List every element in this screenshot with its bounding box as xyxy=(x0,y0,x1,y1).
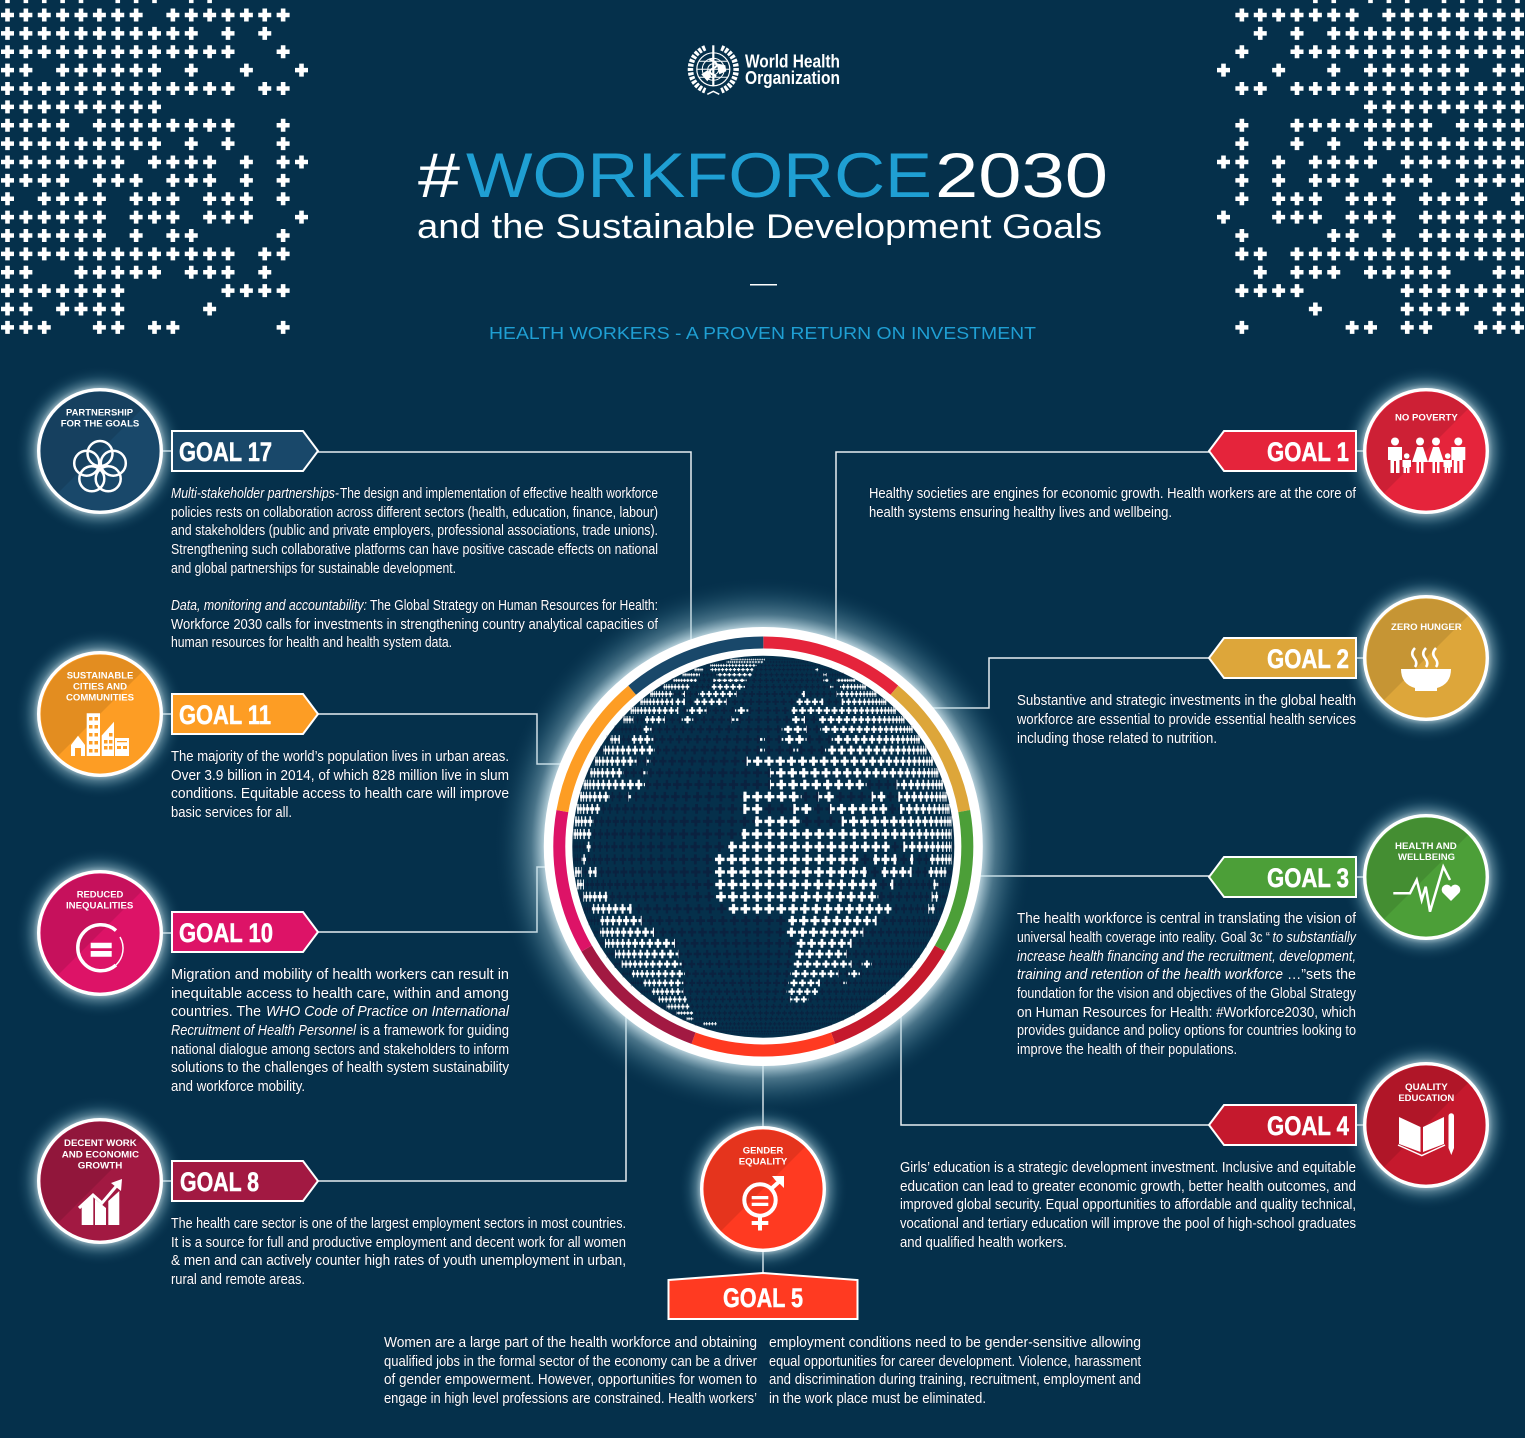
text: goal 3: The health workforce is central in translating the vision of xyxy=(1017,911,1357,927)
text: goal 4: Girls’ education is a strategic development investment. Inclusive and equitable xyxy=(900,1160,1356,1176)
text: goal 8: & men and can actively counter high rates of youth unemployment in urban, xyxy=(171,1253,626,1269)
text: goal 5 right column: in the work place must be eliminated. xyxy=(769,1391,986,1407)
icon: goal 8 badge: DECENT WORK xyxy=(64,1138,137,1148)
text: goal 10: and workforce mobility. xyxy=(171,1079,305,1095)
text: goal 10: Recruitment of Health Personnel xyxy=(171,1023,357,1039)
WHO logo: Organization xyxy=(745,68,840,88)
icon: goal 4 badge xyxy=(1341,1040,1511,1210)
icon: goal 17 badge xyxy=(15,366,185,536)
dotted plus pattern: top right xyxy=(1217,0,1524,334)
icon: goal 3 badge: HEALTH AND xyxy=(1395,841,1457,851)
dotted plus pattern: top left xyxy=(1,0,308,334)
tag: goal 5: GOAL 5 xyxy=(723,1283,803,1313)
text: goal 5 left column: Women are a large part of the health workforce and obtaining xyxy=(384,1335,757,1351)
text: goal 17: Strengthening such collaborative platforms can have positive cascade effects on national xyxy=(171,542,658,558)
Goal 10 xyxy=(15,848,510,1095)
text: goal 5 right column xyxy=(769,1335,1141,1407)
text: goal 17: and global partnerships for sustainable development. xyxy=(171,561,456,577)
icon: goal 3 badge xyxy=(1341,792,1511,962)
text: goal 10: Migration and mobility of health workers can result in xyxy=(171,967,509,983)
ring segments xyxy=(559,642,967,1051)
text: goal 11 xyxy=(171,749,509,821)
subtitle: and the Sustainable Development Goals xyxy=(417,208,1102,246)
icon: goal 8 badge: GROWTH xyxy=(78,1160,122,1170)
text: goal 17 xyxy=(171,486,659,651)
Goal 5 xyxy=(384,1104,1141,1407)
text: goal 10: is a framework for guiding xyxy=(360,1023,509,1039)
icon: goal 5 badge xyxy=(678,1104,848,1274)
text: goal 2: including those related to nutrition. xyxy=(1017,731,1217,747)
tag: goal 1 xyxy=(1209,431,1356,471)
text: goal 5 left column: of gender empowerment. However, opportunities for women to xyxy=(384,1372,757,1388)
connector lines xyxy=(163,451,1364,1280)
WHO logo xyxy=(690,45,840,94)
text: goal 3: increase health financing and the recruitment, development, xyxy=(1017,949,1356,965)
text: goal 3: universal health coverage into reality. Goal 3c “ xyxy=(1017,930,1270,946)
text: goal 4: education can lead to greater economic growth, better health outcomes, and xyxy=(900,1179,1356,1195)
text: goal 17: policies rests on collaboration across different sectors (health, education, finance, labour) xyxy=(171,505,658,521)
text: goal 10: countries. The xyxy=(171,1004,261,1020)
divider xyxy=(750,284,777,286)
title: # xyxy=(418,141,460,211)
text: goal 17: Multi-stakeholder partnerships- xyxy=(171,486,339,502)
text: goal 4: and qualified health workers. xyxy=(900,1235,1067,1251)
tag: goal 1: GOAL 1 xyxy=(1267,437,1349,467)
text: goal 3 xyxy=(1017,911,1357,1058)
icon: goal 11 badge xyxy=(15,629,185,799)
tag: goal 17: GOAL 17 xyxy=(179,437,272,467)
Goal 4 xyxy=(900,1040,1511,1251)
text: goal 10 xyxy=(171,967,510,1095)
tag: goal 10 xyxy=(172,912,318,952)
text: goal 4: improved global security. Equal opportunities to affordable and quality technical, xyxy=(900,1197,1356,1213)
tag: goal 11 xyxy=(172,694,318,734)
icon: goal 17 badge: PARTNERSHIP xyxy=(66,408,133,418)
tag: goal 5 xyxy=(668,1273,858,1319)
text: goal 3: training and retention of the health workforce xyxy=(1017,967,1283,983)
text: goal 5 right column: and discrimination during training, recruitment, employment and xyxy=(769,1372,1141,1388)
icon: goal 10 badge: INEQUALITIES xyxy=(66,900,133,910)
icon: goal 3 badge: WELLBEING xyxy=(1398,852,1455,862)
text: goal 8: rural and remote areas. xyxy=(171,1272,305,1288)
text: goal 8: It is a source for full and productive employment and decent work for all women xyxy=(171,1235,626,1251)
icon: goal 5 badge: EQUALITY xyxy=(739,1156,787,1166)
title xyxy=(418,141,1108,211)
text: goal 11: The majority of the world’s population lives in urban areas. xyxy=(171,749,509,765)
tag: goal 2 xyxy=(1209,638,1356,678)
text: goal 3: foundation for the vision and objectives of the Global Strategy xyxy=(1017,986,1357,1002)
text: goal 5 left column: qualified jobs in the formal sector of the economy can be a driver xyxy=(384,1354,757,1370)
tagline: HEALTH WORKERS - A PROVEN RETURN ON INVESTMENT xyxy=(489,323,1036,343)
icon: goal 11 badge: CITIES AND xyxy=(73,681,128,691)
icon: goal 10 badge xyxy=(15,848,185,1018)
text: goal 1: health systems ensuring healthy lives and wellbeing. xyxy=(869,505,1172,521)
Goal 17 xyxy=(15,366,659,651)
icon: goal 8 badge: AND ECONOMIC xyxy=(62,1149,140,1159)
icon: goal 10 badge: REDUCED xyxy=(77,890,124,900)
text: goal 11: Over 3.9 billion in 2014, of which 828 million live in slum xyxy=(171,768,509,784)
icon: goal 5 badge: GENDER xyxy=(743,1145,784,1155)
text: goal 8: The health care sector is one of the largest employment sectors in most countries. xyxy=(171,1216,626,1232)
text: goal 17: and stakeholders (public and private employers, professional associations, trade unions). xyxy=(171,523,658,539)
text: goal 10: WHO Code of Practice on International xyxy=(266,1004,510,1020)
icon: goal 2 badge xyxy=(1341,573,1511,743)
text: goal 11: basic services for all. xyxy=(171,805,292,821)
tag: goal 3: GOAL 3 xyxy=(1267,863,1349,893)
text: goal 3: …”sets the xyxy=(1287,967,1356,983)
text: goal 5 left column xyxy=(384,1335,757,1407)
text: goal 8 xyxy=(171,1216,626,1288)
text: goal 10: inequitable access to health care, within and among xyxy=(171,986,509,1002)
text: goal 4: vocational and tertiary education will improve the pool of high-school graduates xyxy=(900,1216,1356,1232)
text: goal 3: on Human Resources for Health: #Workforce2030, which xyxy=(1017,1005,1356,1021)
text: goal 2: Substantive and strategic investments in the global health xyxy=(1017,693,1356,709)
central globe with coloured goal ring xyxy=(493,576,1033,1116)
tag: goal 8 xyxy=(172,1161,318,1201)
title: 2030 xyxy=(935,141,1108,211)
icon: goal 11 badge: COMMUNITIES xyxy=(66,692,134,702)
text: goal 4 xyxy=(900,1160,1356,1251)
text: goal 2 xyxy=(1016,693,1356,747)
text: goal 17: The Global Strategy on Human Resources for Health: xyxy=(370,598,658,614)
text: goal 1: Healthy societies are engines for economic growth. Health workers are at the core of xyxy=(869,486,1357,502)
icon: goal 17 badge: FOR THE GOALS xyxy=(61,419,139,429)
icon: goal 11 badge: SUSTAINABLE xyxy=(67,670,133,680)
text: goal 17: Data, monitoring and accountability: xyxy=(171,598,367,614)
tag: goal 4: GOAL 4 xyxy=(1267,1111,1349,1141)
text: goal 10: national dialogue among sectors and stakeholders to inform xyxy=(171,1042,509,1058)
Goal 8 xyxy=(15,1096,626,1288)
tag: goal 3 xyxy=(1209,857,1356,897)
icon: goal 1 badge: NO POVERTY xyxy=(1395,413,1458,423)
text: goal 1 xyxy=(869,486,1357,521)
text: goal 17: Workforce 2030 calls for investments in strengthening country analytical capacities of xyxy=(171,617,659,633)
Goal 1 xyxy=(869,366,1511,536)
text: goal 10: solutions to the challenges of health system sustainability xyxy=(171,1060,510,1076)
tag: goal 17 xyxy=(172,431,318,471)
icon: goal 1 badge xyxy=(1341,366,1511,536)
Goal 2 xyxy=(1016,573,1511,747)
text: goal 17: The design and implementation of effective health workforce xyxy=(340,486,658,502)
text: goal 3: provides guidance and policy options for countries looking to xyxy=(1017,1023,1356,1039)
tag: goal 2: GOAL 2 xyxy=(1267,644,1349,674)
tag: goal 11: GOAL 11 xyxy=(179,700,271,730)
text: goal 5 left column: engage in high level professions are constrained. Health workers’ xyxy=(384,1391,757,1407)
icon: goal 4 badge: QUALITY xyxy=(1405,1082,1448,1092)
icon: goal 8 badge xyxy=(15,1096,185,1266)
Goal 3 xyxy=(1017,792,1511,1058)
tag: goal 4 xyxy=(1209,1105,1356,1145)
text: goal 2: workforce are essential to provide essential health services xyxy=(1016,712,1356,728)
tag: goal 8: GOAL 8 xyxy=(180,1167,259,1197)
title: WORKFORCE xyxy=(466,141,932,211)
text: goal 3: to substantially xyxy=(1272,930,1357,946)
world map globe xyxy=(572,656,954,1038)
Goal 11 xyxy=(15,629,509,821)
text: goal 3: improve the health of their populations. xyxy=(1017,1042,1237,1058)
WHO logo: World Health xyxy=(745,51,840,71)
text: goal 5 right column: equal opportunities for career development. Violence, harassment xyxy=(769,1354,1141,1370)
tag: goal 10: GOAL 10 xyxy=(179,918,273,948)
icon: goal 4 badge: EDUCATION xyxy=(1398,1093,1454,1103)
text: goal 11: conditions. Equitable access to health care will improve xyxy=(171,786,509,802)
text: goal 5 right column: employment conditions need to be gender-sensitive allowing xyxy=(769,1335,1141,1351)
icon: goal 2 badge: ZERO HUNGER xyxy=(1391,622,1462,632)
text: goal 17: human resources for health and health system data. xyxy=(171,635,452,651)
